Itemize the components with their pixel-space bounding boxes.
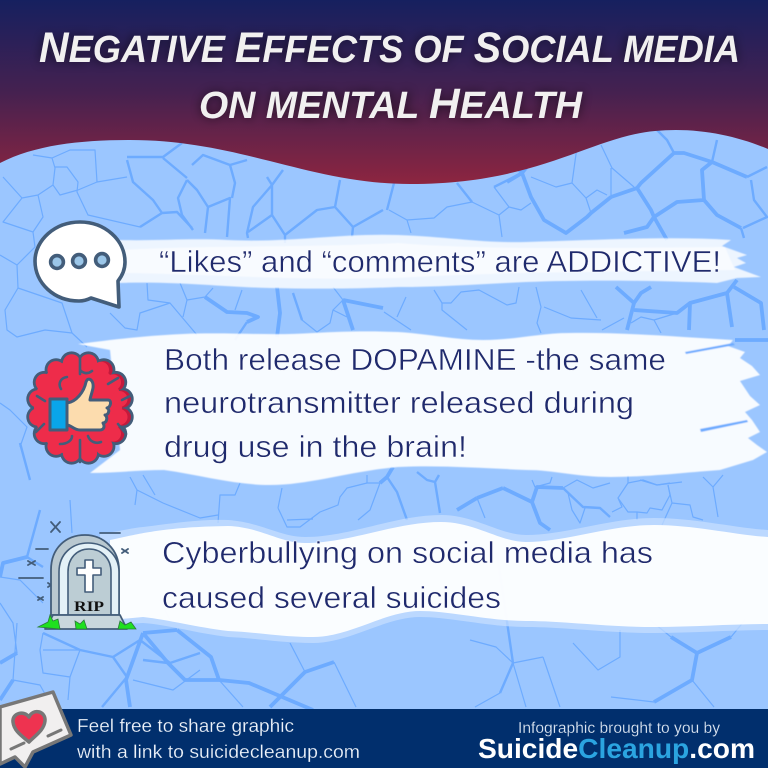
footer band — [0, 709, 768, 768]
main text: cyberbullying: Cyberbullying on social media has — [162, 536, 653, 570]
icon: brain with thumbs up — [26, 351, 134, 465]
brush stroke: cyberbullying — [100, 515, 768, 643]
title: ON MENTAL HEALTH — [199, 85, 584, 127]
title: NEGATIVE EFFECTS OF SOCIAL MEDIA — [39, 24, 740, 72]
footer share text — [76, 716, 360, 762]
icon: tombstone: RIP — [74, 599, 104, 615]
brush stroke: likes — [118, 235, 761, 289]
footer share text: with a link to suicidecleanup.com — [76, 742, 360, 762]
icon: speech bubble — [35, 222, 125, 307]
title — [39, 24, 740, 128]
footer credit: SuicideCleanup.com — [478, 733, 755, 764]
main text: dopamine: neurotransmitter released during — [164, 386, 634, 420]
main text: cyberbullying — [162, 536, 653, 615]
main text: cyberbullying: caused several suicides — [162, 581, 501, 615]
footer credit: Infographic brought to you by — [518, 720, 720, 737]
icon: tombstone — [19, 522, 136, 629]
title: ON MENTAL HEALTH — [199, 80, 584, 128]
icon: heart message card — [0, 692, 71, 767]
main text: dopamine — [164, 343, 666, 464]
header band — [0, 0, 768, 184]
footer share text: Feel free to share graphic — [77, 716, 294, 736]
title: NEGATIVE EFFECTS OF SOCIAL MEDIA — [39, 29, 740, 71]
main text: dopamine: Both release DOPAMINE -the same — [164, 343, 666, 377]
main text: dopamine: drug use in the brain! — [164, 430, 467, 464]
brush stroke: dopamine — [78, 331, 767, 485]
main text: likes: “Likes” and “comments” are ADDICTIVE! — [159, 245, 721, 279]
